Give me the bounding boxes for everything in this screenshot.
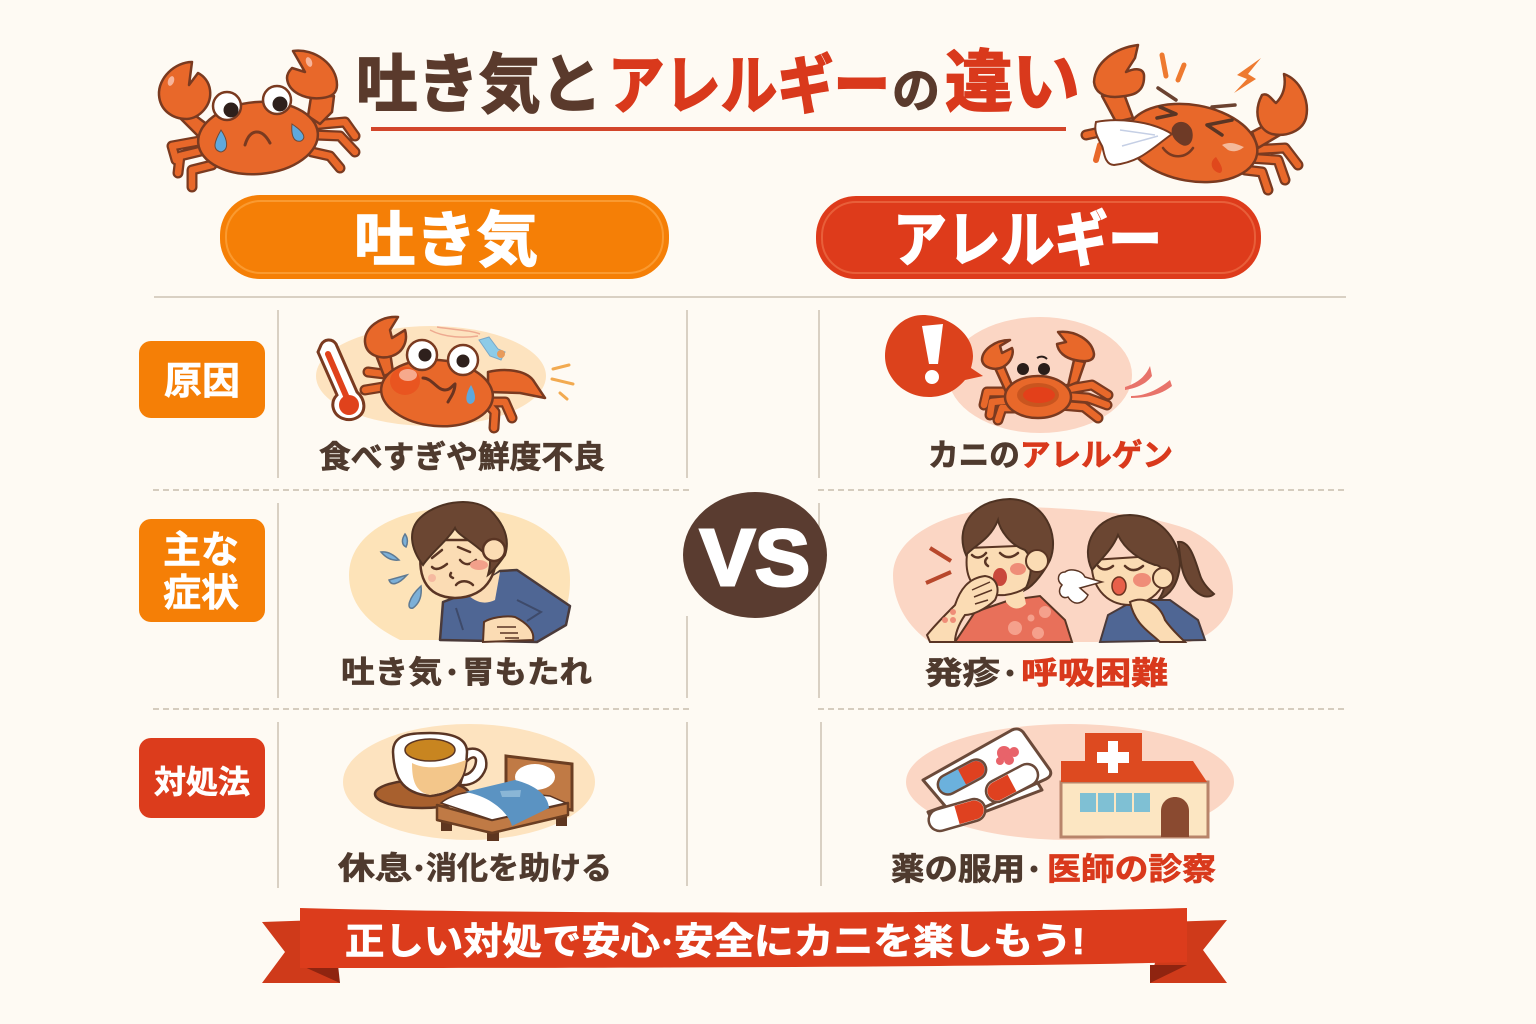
banner: 正しい対処で安心 — [345, 921, 660, 962]
label: main symptoms: 主な — [163, 530, 239, 572]
panel header: nausea — [220, 195, 669, 279]
banner — [262, 908, 1227, 983]
caption: symptoms nausea: 吐き気 — [341, 655, 442, 690]
caption: symptoms allergy — [925, 656, 1168, 691]
panel header: allergy — [816, 196, 1261, 279]
caption: remedy nausea: 消化を助ける — [426, 851, 612, 886]
label: remedy: 対処法 — [154, 764, 250, 800]
title — [356, 45, 1080, 129]
label: main symptoms — [139, 519, 265, 622]
panel header: nausea: 吐き気 — [354, 207, 538, 274]
label: cause: 原因 — [164, 361, 240, 403]
caption: symptoms allergy: 発疹 — [925, 656, 1000, 691]
icon: allergen crab with alert — [885, 315, 1172, 433]
caption: cause allergy: カニのアレルゲン — [928, 438, 1173, 473]
caption: remedy allergy — [891, 852, 1216, 887]
banner: 安全にカニを楽しもう! — [674, 921, 1085, 962]
caption: remedy nausea: 休息 — [338, 851, 412, 886]
icon: medicine and hospital — [906, 724, 1234, 840]
icon: nauseous person — [349, 502, 570, 642]
VS badge: VS — [700, 513, 810, 602]
caption: symptoms allergy: 呼吸困難 — [1021, 656, 1168, 691]
title: の — [892, 65, 940, 118]
title: 吐き気と — [356, 49, 602, 121]
caption: remedy allergy: 医師の診察 — [1047, 852, 1216, 887]
label: remedy — [139, 738, 265, 818]
label: main symptoms: 症状 — [163, 573, 239, 615]
title: 違い — [945, 45, 1080, 121]
caption: cause nausea: 食べすぎや鮮度不良 — [319, 440, 605, 475]
label: cause — [139, 341, 265, 418]
caption: remedy allergy: 薬の服用 — [891, 852, 1025, 887]
icon: crying crab — [159, 51, 355, 187]
caption: symptoms nausea: 胃もたれ — [462, 655, 592, 690]
caption: symptoms nausea — [341, 655, 592, 690]
VS badge — [683, 492, 827, 618]
icon: tea and bed — [343, 724, 595, 841]
icon: overheated crab — [316, 317, 573, 431]
icon: allergic persons — [893, 499, 1233, 642]
title: アレルギー — [608, 50, 890, 122]
caption: remedy nausea — [338, 851, 612, 886]
icon: sneezing crab — [1086, 45, 1307, 192]
panel header: allergy: アレルギー — [893, 207, 1162, 274]
